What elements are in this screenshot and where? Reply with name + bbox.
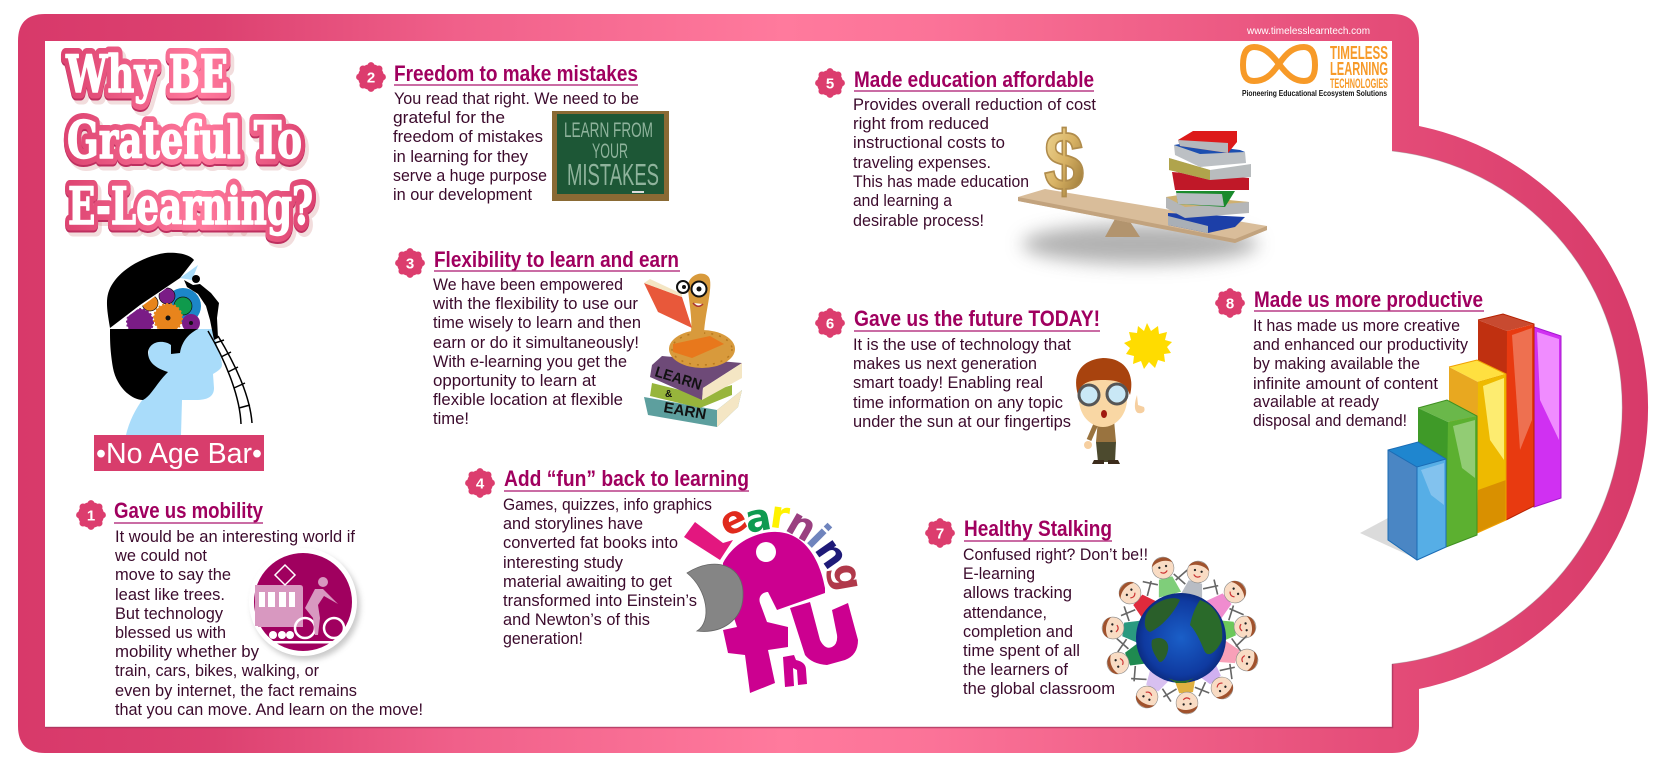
body text 8: available at ready bbox=[1253, 393, 1380, 411]
badge 5 bbox=[815, 68, 845, 98]
body text 2: serve a huge purpose bbox=[393, 167, 547, 185]
body text 6 bbox=[853, 336, 1071, 431]
badge 1 bbox=[76, 500, 106, 530]
logo: Timeless Learning Technologies: TIMELESS bbox=[1330, 43, 1388, 63]
badge 1: 1 bbox=[87, 508, 95, 524]
body text 5: desirable process! bbox=[853, 212, 984, 230]
panel 1: Gave us mobility bbox=[76, 498, 423, 719]
body text 4: generation! bbox=[503, 630, 583, 648]
badge 7 bbox=[925, 518, 955, 548]
body text 6: It is the use of technology that bbox=[853, 336, 1071, 354]
body text 8: infinite amount of content bbox=[1253, 375, 1438, 393]
illustration: Learning fun elephant: e bbox=[712, 495, 754, 545]
image: chalkboard: LEARN FROM bbox=[564, 119, 653, 142]
label: No Age Bar: •No Age Bar• bbox=[96, 438, 262, 470]
body text 4: Games, quizzes, info graphics bbox=[503, 496, 712, 514]
body text 4: interesting study bbox=[503, 554, 624, 572]
badge 4 bbox=[465, 468, 495, 498]
panel 4: Add fun back to learning bbox=[465, 466, 872, 693]
body text 7: the global classroom bbox=[963, 680, 1115, 698]
body text 2: in our development bbox=[393, 186, 532, 204]
illustration: Learning fun elephant: n bbox=[779, 499, 825, 551]
title bbox=[65, 45, 316, 242]
body text 4: converted fat books into bbox=[503, 534, 678, 552]
title: E-Learning? bbox=[68, 179, 313, 239]
body text 3: opportunity to learn at bbox=[433, 372, 596, 390]
body text 6: time information on any topic bbox=[853, 394, 1063, 412]
body text 5: and learning a bbox=[853, 192, 953, 210]
body text 6: makes us next generation bbox=[853, 355, 1037, 373]
body text 2: freedom of mistakes bbox=[393, 128, 543, 146]
body text 5: This has made education bbox=[853, 173, 1029, 191]
website address: www.timelesslearntech.com bbox=[1246, 26, 1370, 37]
body text 3: With e-learning you get the bbox=[433, 353, 627, 371]
body text 8: disposal and demand! bbox=[1253, 412, 1407, 430]
illustration: Learning fun elephant: a bbox=[742, 494, 774, 542]
body text 2: in learning for they bbox=[393, 148, 529, 166]
illustration: Learning fun elephant: g bbox=[824, 560, 872, 594]
panel 3: Flexibility to learn and earn bbox=[395, 247, 742, 428]
chart: 3D glass bar chart bbox=[1360, 314, 1561, 560]
title: E-Learning? bbox=[68, 177, 313, 237]
logo: Timeless Learning Technologies: LEARNING bbox=[1330, 59, 1388, 79]
body text 4: and storylines have bbox=[503, 515, 643, 533]
body text 3: time! bbox=[433, 410, 469, 428]
logo: Timeless Learning Technologies: TECHNOLOGIES bbox=[1330, 75, 1388, 91]
title: Why BE bbox=[65, 45, 228, 105]
title: Why BE bbox=[68, 50, 231, 110]
icon: head with gears and ladder bbox=[107, 253, 252, 435]
badge 8: 8 bbox=[1226, 296, 1234, 312]
illustration: Learning fun elephant: r bbox=[768, 492, 793, 538]
body text 1: But technology bbox=[115, 605, 224, 623]
body text 7: Confused right? Don’t be!! bbox=[963, 546, 1148, 564]
body text 7: allows tracking bbox=[963, 584, 1072, 602]
body text 7: E-learning bbox=[963, 565, 1035, 583]
body text 3: with the flexibility to use our bbox=[432, 295, 639, 313]
body text 7 bbox=[963, 546, 1148, 698]
body text 1: blessed us with bbox=[115, 624, 226, 642]
body text 3: earn or do it simultaneously! bbox=[433, 334, 639, 352]
body text 1: least like trees. bbox=[115, 586, 225, 604]
badge 2: 2 bbox=[367, 70, 375, 86]
badge 7: 7 bbox=[936, 526, 944, 542]
body text 5: instructional costs to bbox=[853, 134, 1005, 152]
body text 3: time wisely to learn and then bbox=[433, 314, 641, 332]
body text 3 bbox=[432, 276, 641, 428]
body text 8: by making available the bbox=[1253, 355, 1420, 373]
body text 4 bbox=[503, 496, 712, 648]
body text 5: Provides overall reduction of cost bbox=[853, 96, 1096, 114]
body text 4: material awaiting to get bbox=[503, 573, 672, 591]
body text 6: smart toady! Enabling real bbox=[853, 374, 1043, 392]
body text 8 bbox=[1253, 317, 1469, 430]
title: Grateful To bbox=[67, 111, 302, 171]
body text 1: even by internet, the fact remains bbox=[115, 682, 357, 700]
illustration: bookworm on books bbox=[644, 274, 742, 427]
title: Grateful To bbox=[70, 116, 305, 176]
body text 3: We have been empowered bbox=[433, 276, 623, 294]
illustration: boy with glasses bbox=[1076, 358, 1145, 464]
illustration: Learning fun elephant bbox=[684, 492, 872, 693]
body text 1: mobility whether by bbox=[115, 643, 260, 661]
body text 7: attendance, bbox=[963, 604, 1047, 622]
illustration: sun bbox=[1124, 323, 1172, 369]
body text 1: train, cars, bikes, walking, or bbox=[115, 662, 319, 680]
logo: Timeless Learning Technologies bbox=[1242, 43, 1388, 98]
heading 5: Made education affordable bbox=[854, 67, 1094, 92]
body text 1: move to say the bbox=[115, 566, 231, 584]
body text 8: and enhanced our productivity bbox=[1253, 336, 1469, 354]
heading 6: Gave us the future TODAY! bbox=[854, 306, 1100, 331]
body text 7: time spent of all bbox=[963, 642, 1080, 660]
illustration: children around the globe bbox=[1099, 552, 1265, 718]
body text 4: and Newton’s of this bbox=[503, 611, 650, 629]
body text 2: grateful for the bbox=[393, 109, 505, 127]
heading 4: Add “fun” back to learning bbox=[504, 466, 749, 491]
heading 3: Flexibility to learn and earn bbox=[434, 247, 679, 272]
title: Why BE bbox=[65, 45, 228, 105]
heading 1: Gave us mobility bbox=[114, 498, 264, 523]
body text 1: we could not bbox=[114, 547, 207, 565]
badge 3 bbox=[395, 248, 425, 278]
badge 2 bbox=[356, 62, 386, 92]
badge 4: 4 bbox=[476, 476, 485, 492]
title: Grateful To bbox=[67, 113, 302, 173]
body text 7: the learners of bbox=[963, 661, 1068, 679]
image: chalkboard: YOUR bbox=[592, 140, 628, 163]
logo: Timeless Learning Technologies: Pioneering Educational Ecosystem Solutions bbox=[1242, 89, 1387, 98]
body text 5: right from reduced bbox=[853, 115, 989, 133]
body text 5: traveling expenses. bbox=[853, 154, 991, 172]
body text 1: that you can move. And learn on the move! bbox=[115, 701, 423, 719]
body text 1: It would be an interesting world if bbox=[115, 528, 355, 546]
panel 8: Made us more productive bbox=[1215, 287, 1561, 560]
panel 7: Healthy Stalking bbox=[925, 516, 1265, 718]
illustration: bookworm on books: EARN bbox=[662, 399, 708, 423]
body text 3: flexible location at flexible bbox=[433, 391, 623, 409]
body text 1 bbox=[114, 528, 423, 719]
illustration: Learning fun elephant: n bbox=[806, 529, 858, 577]
title: Why BE bbox=[65, 47, 228, 107]
body text 2 bbox=[393, 90, 639, 204]
icon: train and cyclist bbox=[249, 548, 360, 660]
body text 4: transformed into Einstein’s bbox=[503, 592, 697, 610]
badge 6: 6 bbox=[826, 316, 834, 332]
badge 3: 3 bbox=[406, 256, 414, 272]
heading 8: Made us more productive bbox=[1254, 287, 1483, 312]
panel 5: Made education affordable bbox=[815, 67, 1267, 264]
badge 6 bbox=[815, 308, 845, 338]
heading 7: Healthy Stalking bbox=[964, 516, 1112, 541]
body text 6: under the sun at our fingertips bbox=[853, 413, 1071, 431]
image: chalkboard bbox=[552, 111, 669, 201]
body text 5 bbox=[853, 96, 1096, 230]
image: chalkboard: MISTAKES bbox=[567, 157, 659, 192]
title: Grateful To bbox=[67, 111, 302, 171]
body text 2: You read that right. We need to be bbox=[394, 90, 639, 108]
heading 2: Freedom to make mistakes bbox=[394, 61, 638, 86]
illustration: bookworm on books: & bbox=[665, 389, 672, 400]
panel 6: Gave us the future TODAY bbox=[815, 306, 1172, 464]
illustration: Learning fun elephant: i bbox=[799, 516, 839, 556]
body text 8: It has made us more creative bbox=[1253, 317, 1460, 335]
badge 5: 5 bbox=[826, 76, 834, 92]
badge 8 bbox=[1215, 288, 1245, 318]
body text 7: completion and bbox=[963, 623, 1073, 641]
title: E-Learning? bbox=[71, 182, 316, 242]
illustration: books outweigh dollar on seesaw: $ bbox=[1044, 114, 1084, 208]
illustration: books outweigh dollar on seesaw bbox=[1018, 114, 1267, 264]
illustration: bookworm on books: LEARN bbox=[653, 364, 704, 394]
title: E-Learning? bbox=[68, 177, 313, 237]
panel 2: Freedom to make mistakes bbox=[356, 61, 669, 204]
